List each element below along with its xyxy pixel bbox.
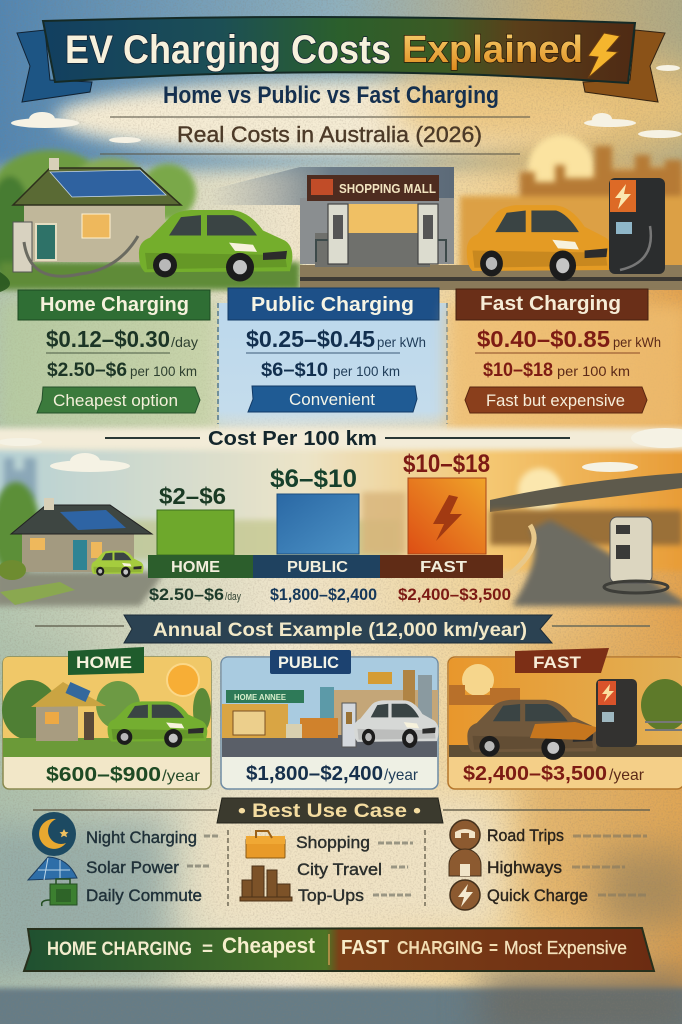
public price per 100 km: $6–$10	[261, 360, 328, 381]
summary left: HOME CHARGING	[47, 939, 192, 960]
heading: cost per 100 km: Cost Per 100 km	[208, 428, 377, 450]
public ribbon	[248, 386, 417, 412]
distant trees and ground	[0, 458, 406, 606]
use case column: fast: Highways	[487, 858, 562, 877]
home tab	[68, 647, 144, 675]
sun	[518, 468, 562, 512]
panel: public charging	[218, 288, 447, 438]
home header	[18, 290, 210, 320]
use case column: home: Solar Power	[86, 858, 179, 877]
label strip	[148, 555, 503, 578]
public charging pumps	[328, 204, 438, 264]
summary left: Cheapest	[222, 933, 316, 958]
use case column: fast	[449, 820, 648, 910]
heading: best use case: • Best Use Case •	[238, 801, 421, 822]
shopping mall	[209, 167, 454, 267]
summary right: =	[489, 938, 498, 958]
public price per kwh: $0.25–$0.45	[246, 326, 375, 352]
panel: home charging: per 100 km	[130, 363, 197, 379]
orange car	[467, 205, 612, 281]
summary left: =	[202, 939, 213, 960]
panel: fast charging	[448, 289, 682, 435]
banner body	[43, 17, 635, 83]
panel: annual fast: /year	[609, 767, 645, 784]
use case column: public	[228, 830, 425, 906]
values under bars	[149, 585, 511, 604]
home price per 100 km: $2.50–$6	[47, 360, 127, 381]
fast price per 100 km: $10–$18	[483, 360, 553, 381]
home price per kwh: $0.12–$0.30	[46, 326, 170, 352]
fast ribbon	[465, 387, 647, 413]
fast bar: $10–$18	[403, 450, 490, 478]
public scene	[222, 658, 439, 757]
use case column: home: Night Charging	[86, 828, 197, 847]
heading: annual cost example	[35, 615, 650, 643]
fast annual price: $2,400–$3,500	[463, 763, 607, 785]
panel: home charging: Home Charging	[40, 294, 189, 316]
panel: home charging: /day	[171, 334, 198, 350]
clouds	[11, 65, 682, 143]
panel: public charging: per 100 km	[333, 363, 400, 379]
label strip: HOME	[171, 559, 220, 576]
icon: road	[450, 820, 480, 850]
summary left	[47, 933, 316, 960]
label strip: FAST	[420, 559, 467, 576]
subtitle: Home vs Public vs Fast Charging	[163, 82, 499, 109]
fast tab	[515, 648, 609, 673]
mall sign	[307, 175, 439, 201]
icon: green bag	[42, 879, 77, 906]
icon: city buildings	[240, 866, 292, 901]
panel: annual fast: FAST	[533, 653, 582, 672]
use case column: home	[28, 812, 220, 906]
subtitle text: region: Real Costs in Australia (2026)	[177, 122, 482, 147]
panel: annual fast	[448, 648, 682, 789]
heading: best use case	[33, 798, 650, 823]
public bar	[270, 465, 359, 554]
illustration: three charging scenes	[0, 135, 682, 292]
roadside charger	[604, 517, 668, 593]
panel: annual home	[2, 647, 211, 789]
panel: annual home: /year	[162, 768, 201, 785]
panel: fast charging: Fast Charging	[480, 293, 621, 315]
use case column: home: Daily Commute	[86, 886, 202, 905]
panel: public charging: Convenient	[289, 390, 375, 409]
ground	[0, 262, 682, 292]
public scene: HOME ANNEE	[234, 693, 287, 702]
icon: solar panel	[28, 857, 77, 880]
panel: annual home: HOME	[76, 653, 132, 672]
public bar: $6–$10	[270, 465, 357, 493]
fast charger	[609, 178, 665, 274]
values under bars: $1,800–$2,400	[270, 585, 377, 604]
green car	[139, 210, 292, 281]
title accent word: Explained	[402, 29, 583, 71]
use case column: fast: Road Trips	[487, 826, 564, 845]
summary right: CHARGING	[397, 938, 483, 958]
summary banner	[24, 928, 654, 971]
summary right	[341, 937, 627, 959]
use case column: fast: Quick Charge	[487, 886, 588, 905]
panel: home charging: Cheapest option	[53, 391, 178, 410]
fast header	[456, 289, 648, 320]
use case column: public: City Travel	[297, 860, 382, 879]
banner tails	[17, 30, 665, 102]
small house	[0, 498, 152, 580]
fast price per kwh: $0.40–$0.85	[477, 326, 610, 352]
label strip: PUBLIC	[287, 559, 348, 576]
panel: fast charging: Fast but expensive	[486, 391, 625, 410]
home bar: $2–$6	[159, 483, 226, 509]
overpass and road	[490, 473, 682, 606]
public header	[228, 288, 439, 320]
values under bars: /day	[225, 591, 241, 603]
trees	[0, 150, 196, 280]
panel: annual public: PUBLIC	[278, 653, 339, 672]
shopping mall: SHOPPING MALL	[339, 181, 436, 196]
title text: EV Charging Costs	[65, 28, 391, 72]
title banner	[17, 17, 665, 102]
fast scene	[449, 658, 682, 760]
home bar	[157, 483, 234, 555]
panel: annual public	[221, 650, 439, 789]
panel: home charging	[0, 290, 218, 430]
icon: highway	[449, 849, 481, 876]
icon: quick charge bolt	[450, 880, 480, 910]
summary right: Most Expensive	[504, 938, 627, 958]
panel: annual public: /year	[384, 767, 419, 784]
illustration: cost chart scene	[0, 428, 682, 606]
panel: public charging: per kWh	[377, 334, 426, 350]
home annual price: $600–$900	[46, 764, 161, 786]
use case column: public: Top-Ups	[298, 886, 364, 905]
bar chart	[148, 450, 511, 604]
home scene	[2, 657, 211, 757]
sun and city skyline	[460, 135, 682, 276]
use case column: public: Shopping	[296, 833, 370, 852]
clouds	[0, 428, 682, 472]
house with solar roof	[13, 158, 181, 276]
icon: lightning bolt	[588, 33, 620, 78]
icon: shopping bag	[246, 831, 285, 858]
panel: fast charging: per kWh	[613, 334, 661, 350]
home ribbon	[37, 387, 200, 413]
icon: moon	[32, 812, 76, 856]
panel: public charging: Public Charging	[251, 294, 414, 316]
public annual price: $1,800–$2,400	[246, 763, 383, 785]
fast bar	[403, 450, 490, 554]
summary right: FAST	[341, 937, 389, 959]
panel: fast charging: per 100 km	[557, 363, 630, 379]
small green car	[91, 551, 144, 577]
heading: annual cost example: Annual Cost Example (12,000 km/year)	[153, 620, 527, 641]
values under bars: $2,400–$3,500	[398, 585, 511, 604]
values under bars: $2.50–$6	[149, 585, 224, 604]
public tab	[270, 650, 351, 674]
